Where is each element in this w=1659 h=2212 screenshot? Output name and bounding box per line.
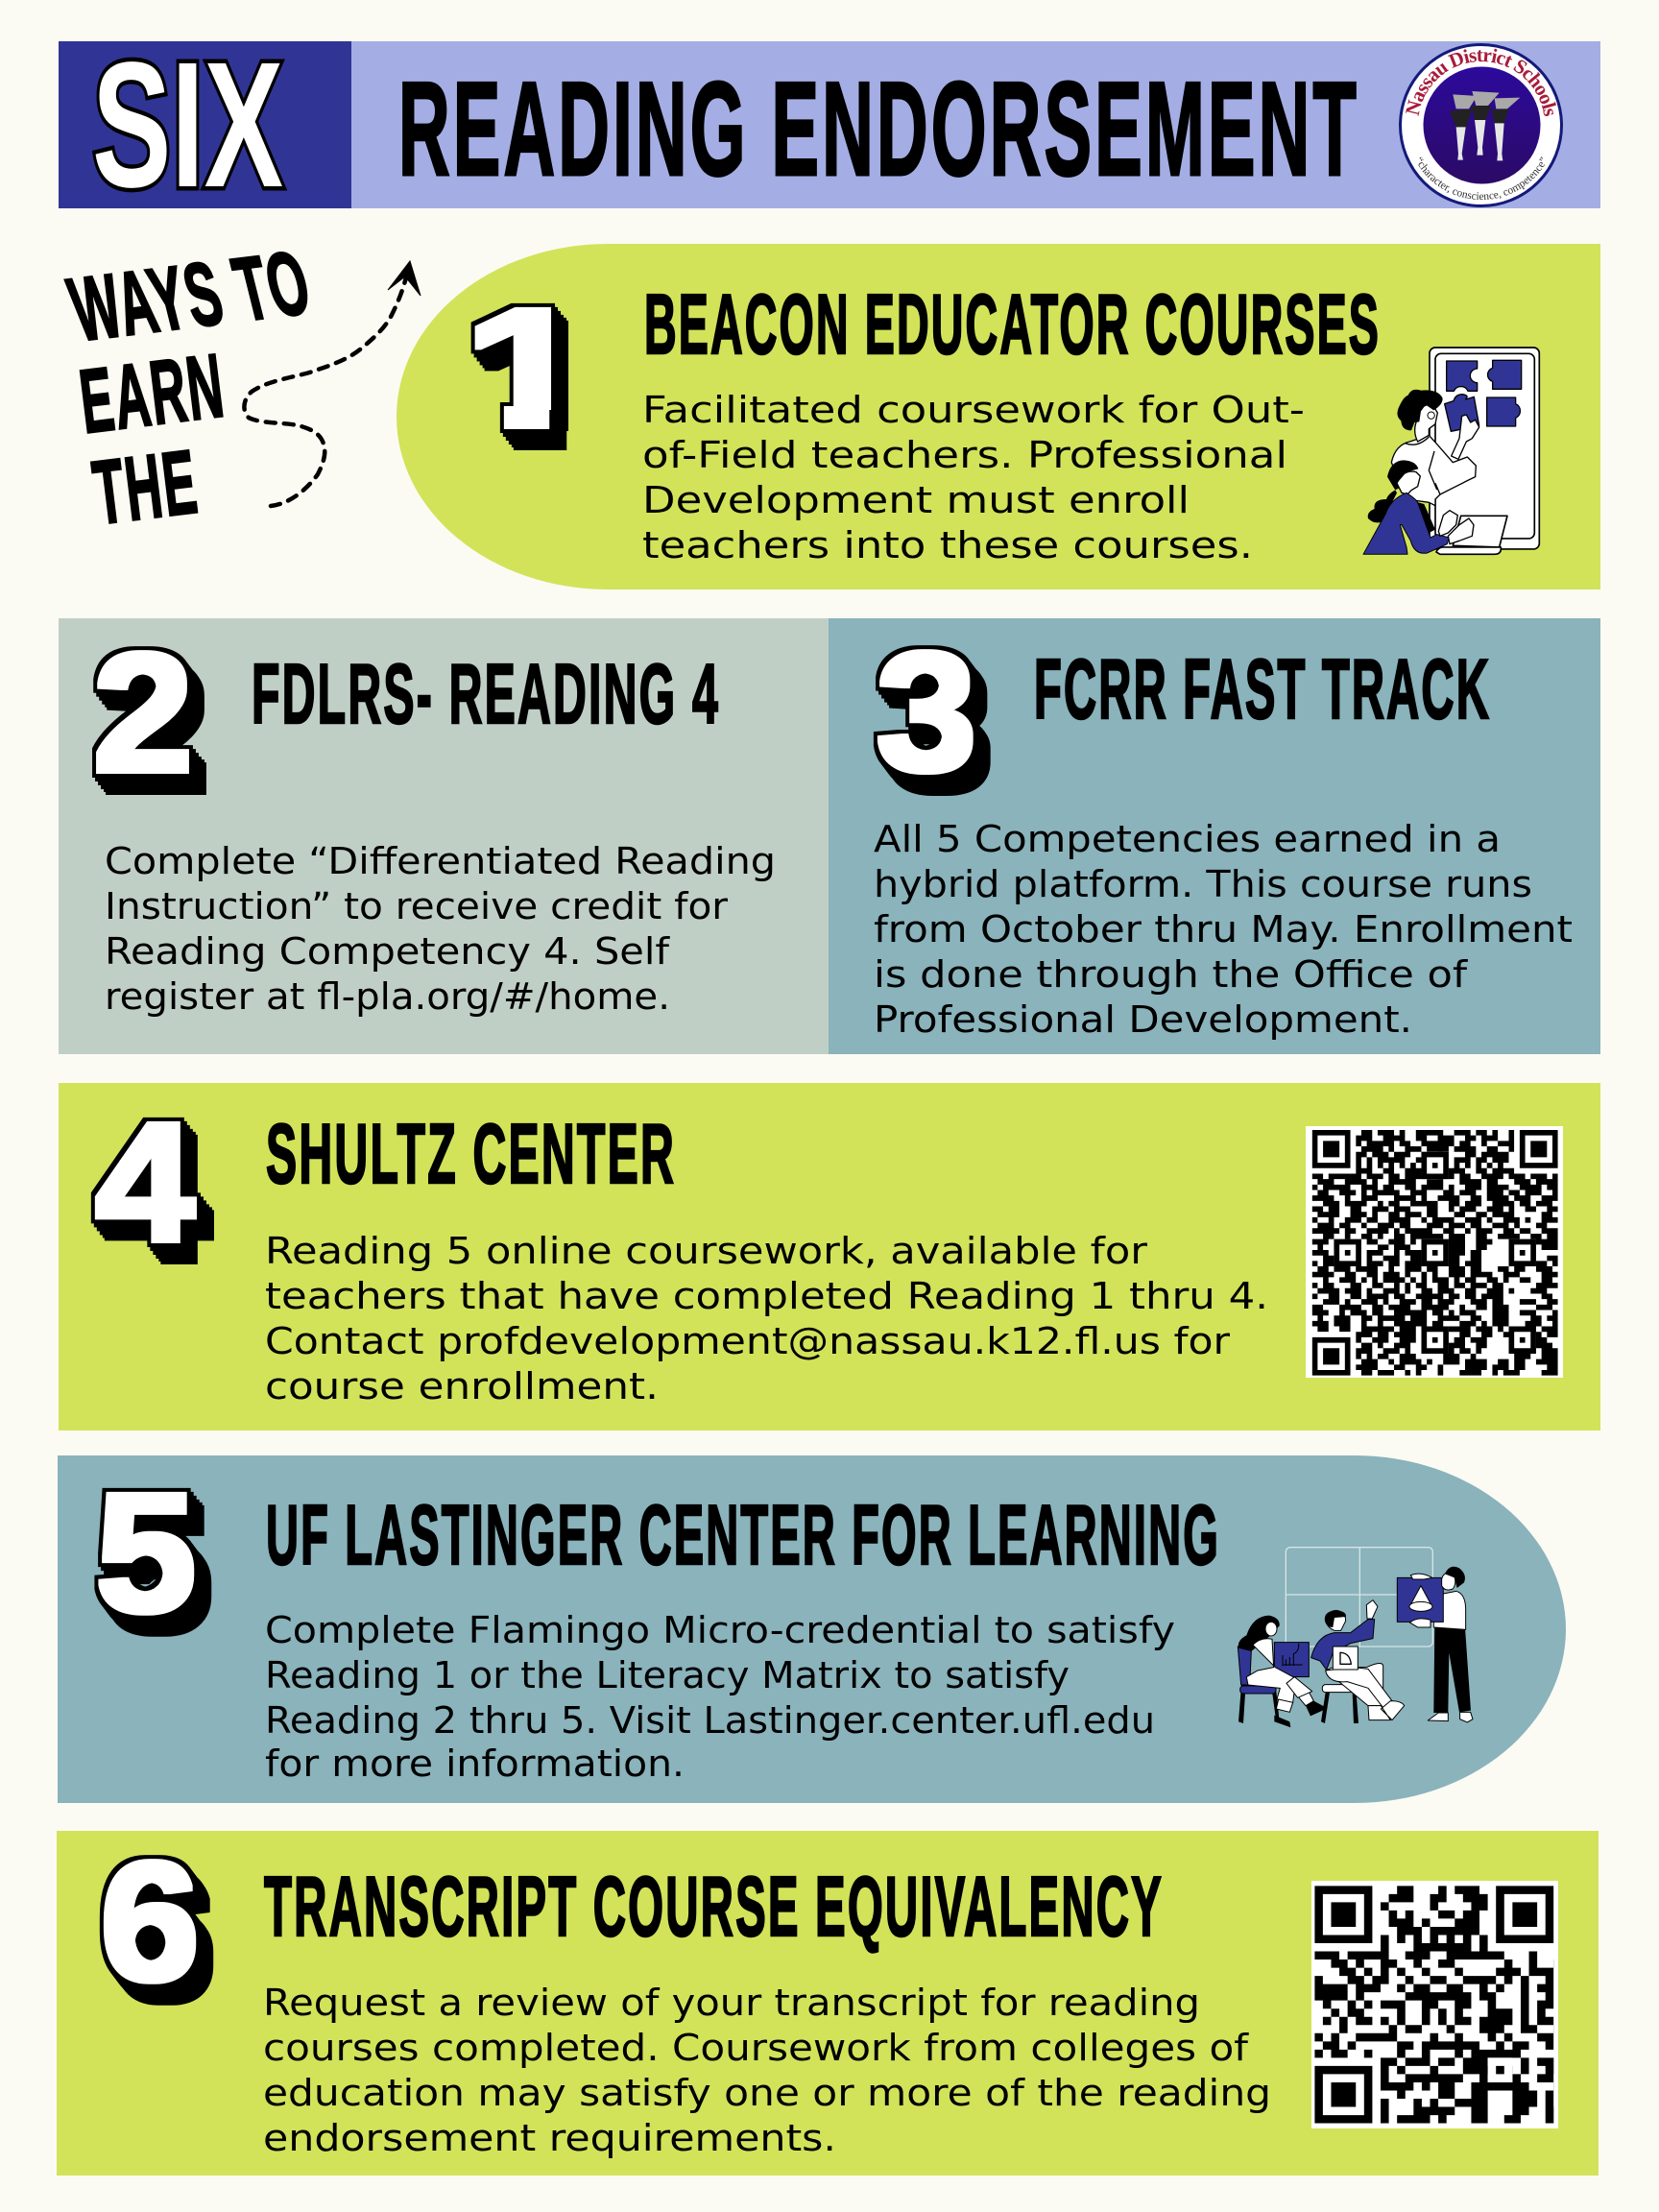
heading: FDLRS- READING 4 [252,646,720,741]
panel: 5 UF Lastinger Center [58,1455,1566,1803]
QR code: Shultz Center [1306,1126,1563,1378]
number 1: 1 [462,274,591,462]
text block: Reading Competency 4. Self [105,930,671,973]
heading: SIX: SIX [92,26,283,225]
text block: is done through the Office of [874,953,1469,996]
text block: Request a review of your transcript for reading [263,1982,1200,2024]
text block: Contact profdevelopment@nassau.k12.fl.us for [265,1320,1230,1362]
number 3: 3 [876,618,977,806]
header banner [59,26,1600,225]
panel: 1 beacon educator courses [397,244,1600,589]
text block: teachers that have completed Reading 1 thru 4. [265,1275,1268,1317]
number 4: 4 [95,1089,195,1277]
text block: Complete “Differentiated Reading [105,840,776,882]
text block: for more information. [265,1743,685,1785]
text block: All 5 Competencies earned in a [874,818,1501,860]
text block: Reading 5 online coursework, available for [265,1230,1147,1272]
heading: ways to earn the [60,232,321,543]
heading: ways to earn the: WAYS TO [60,232,321,359]
text block [874,818,1573,1041]
panel: 6 transcript course equivalency [57,1828,1599,2176]
text block: endorsement requirements. [263,2117,836,2159]
text block [642,389,1305,566]
text block: of-Field teachers. Professional [642,434,1287,476]
text block: Instruction” to receive credit for [105,885,728,927]
text block: Professional Development. [874,998,1412,1041]
text block: Reading 2 thru 5. Visit Lastinger.center.ufl.edu [265,1699,1155,1742]
icon: two people assembling puzzle [1363,348,1539,554]
text block: education may satisfy one or more of the reading [263,2072,1271,2114]
panel: 3 FCRR fast track [829,618,1600,1054]
heading: SHULTZ CENTER [266,1106,676,1201]
number 6: 6 [100,1828,200,2016]
icon: three people with math cards [1238,1548,1473,1727]
number 5: 5 [96,1459,196,1647]
panel: 2 FDLRS reading 4 [59,618,829,1054]
text block [265,1609,1175,1785]
text block: teachers into these courses. [642,524,1253,566]
text block [105,840,776,1018]
text block [265,1230,1268,1407]
text block: courses completed. Coursework from colleges of [263,2027,1250,2069]
number 2: 2 [92,619,194,807]
text block: Facilitated coursework for Out- [642,389,1305,431]
text block: Development must enroll [642,479,1190,521]
text block [263,1982,1271,2159]
text block: register at fl-pla.org/#/home. [105,975,670,1018]
logo: Nassau District Schools: “character, conscience, competence” [1419,156,1545,200]
arrow: dashed squiggle [244,261,421,506]
heading: ways to earn the: THE [88,430,204,543]
QR code: transcript [1311,1881,1562,2128]
panel: 4 Shultz Center [59,1083,1600,1431]
text block: from October thru May. Enrollment [874,908,1573,950]
heading: ways to earn the: EARN [75,334,229,452]
text block: course enrollment. [265,1365,659,1407]
text block: Complete Flamingo Micro-credential to satisfy [265,1609,1175,1651]
text block: hybrid platform. This course runs [874,863,1532,905]
logo: Nassau District Schools: Nassau District Schools [1406,48,1556,116]
text block: Reading 1 or the Literacy Matrix to satisfy [265,1654,1070,1696]
logo: Nassau District Schools [1399,43,1563,207]
